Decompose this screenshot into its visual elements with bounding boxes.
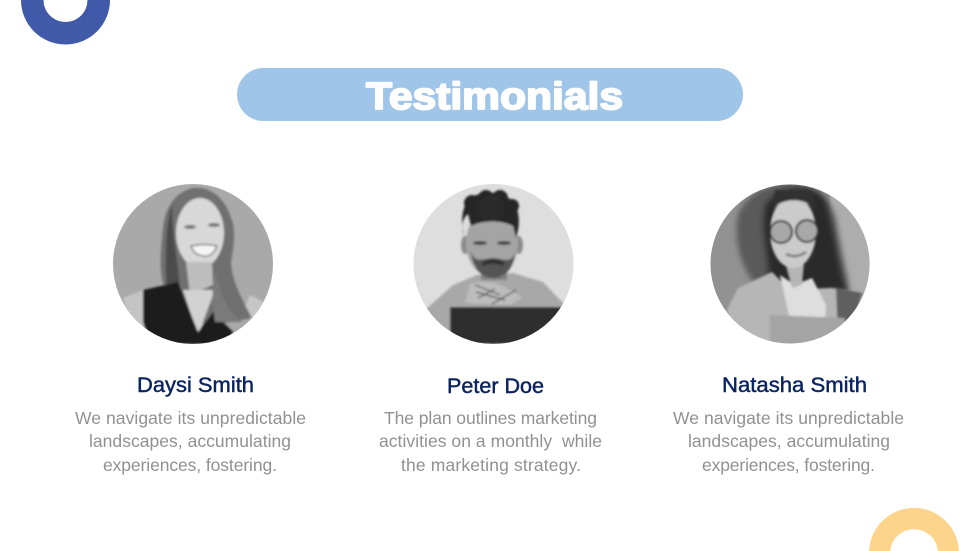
portrait: Daysi Smith (113, 184, 273, 344)
quote (75, 408, 306, 475)
quote: experiences, fostering. (702, 455, 875, 475)
testimonial: Daysi Smith (75, 184, 306, 475)
quote: We navigate its unpredictable (75, 408, 306, 428)
quote: activities on a monthly while (379, 431, 602, 451)
quote (379, 408, 602, 475)
name: Natasha Smith (722, 374, 867, 397)
quote: landscapes, accumulating (688, 431, 890, 451)
quote (673, 408, 904, 475)
testimonial: Natasha Smith (673, 182, 904, 475)
portrait: Natasha Smith (710, 182, 870, 344)
name: Peter Doe (447, 375, 544, 398)
name: Daysi Smith (137, 374, 254, 397)
quote: experiences, fostering. (103, 455, 277, 475)
decorative blue ring, top left (21, 0, 110, 44)
quote: landscapes, accumulating (89, 431, 291, 451)
testimonial: Peter Doe (379, 184, 602, 475)
quote: the marketing strategy. (401, 455, 581, 475)
quote: We navigate its unpredictable (673, 408, 904, 428)
title: Testimonials (366, 76, 623, 118)
quote: The plan outlines marketing (384, 408, 597, 428)
portrait: Peter Doe (413, 184, 574, 344)
title banner (237, 68, 743, 121)
decorative yellow ring, bottom right (869, 508, 959, 551)
